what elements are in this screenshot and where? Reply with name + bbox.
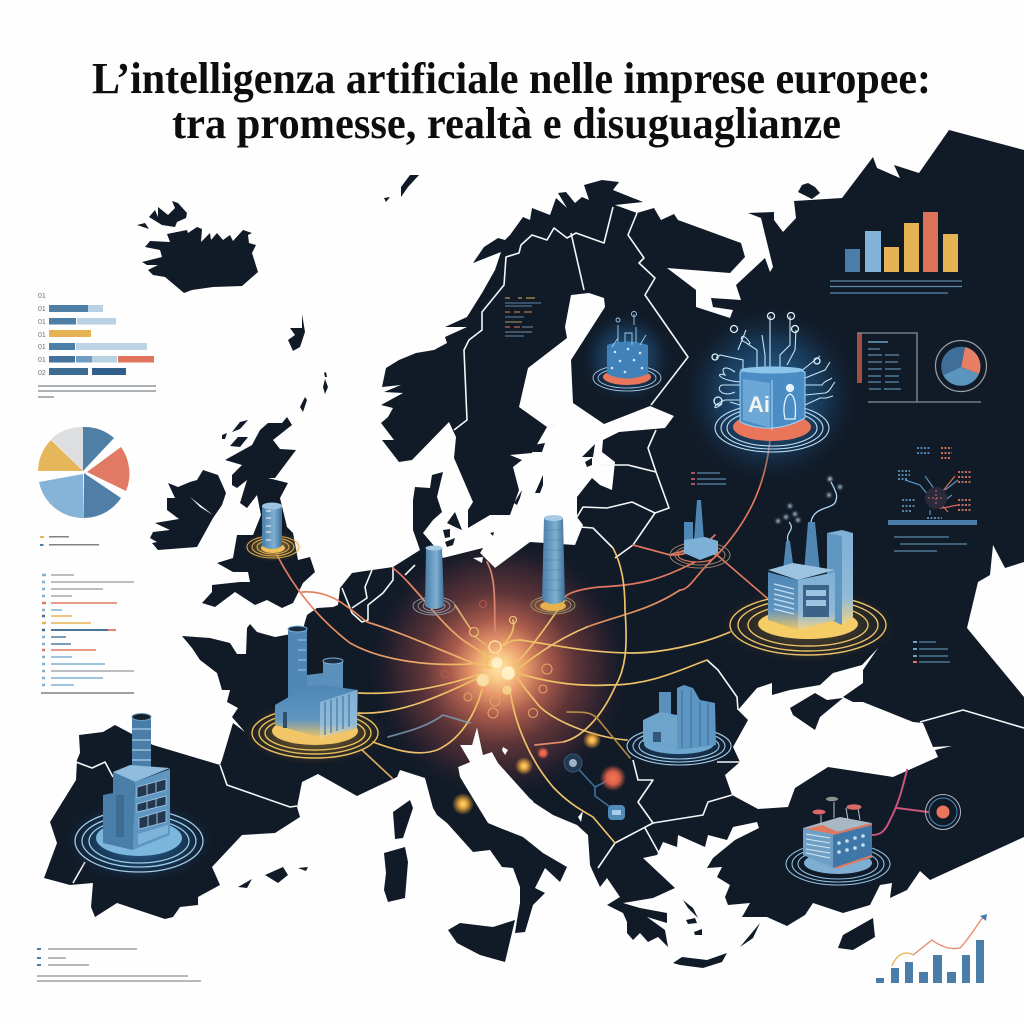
title: L’intelligenza artificiale nelle imprese europee: [92,54,931,103]
left chart: stacked bars: 01 [38,293,46,300]
country borders [73,207,1024,883]
left chart: pie [38,427,129,518]
node graph [564,754,626,820]
central glow [380,542,619,795]
left chart: stacked bars: 02 [38,370,46,377]
building: eastern factory [718,477,898,663]
iceland [137,201,258,293]
building: France [243,626,387,765]
tower: UK [243,502,303,562]
smoke [787,482,837,541]
building: Spain [61,714,217,885]
building: Turkey [786,797,890,885]
map of Europe [44,130,1024,968]
chart: bottom right bars and trend [876,914,987,983]
caption: eastern legend [913,642,950,662]
chart: top right bars [830,212,962,293]
left chart: stacked bars: 01 [38,319,46,326]
left chart: stacked bars [38,293,156,397]
bottom-left legend [37,949,201,981]
crimea [790,693,843,730]
AI cube [678,303,862,487]
title [92,54,931,148]
title: tra promesse, realtà e disuguaglianze [172,99,841,148]
great britain [202,417,315,608]
pie legend [40,536,99,546]
tower: Germany [413,546,455,615]
circuit traces [715,316,835,408]
hub nodes and rings [442,600,552,718]
AI cube: Ai [748,392,770,417]
figure [784,384,795,419]
tower: Poland [527,515,579,617]
building: Ukraine [621,685,737,770]
left chart: stacked bars: 01 [38,344,46,351]
mediterranean islands [238,800,875,968]
caption: Sweden legend [505,298,541,336]
ireland [150,470,226,550]
Finland AI module [579,310,675,406]
panel: text box and pie [857,333,986,402]
white inlets [190,497,583,822]
left chart: stacked bars: 01 [38,332,46,339]
left chart: stacked bars: 01 [38,306,46,313]
black sea [725,648,952,809]
left chart: stacked bars: 01 [38,357,46,364]
network caption [888,520,977,551]
left list with coloured rules [41,575,134,693]
building: small factory [670,500,730,568]
target icon [926,794,960,830]
small islands [222,175,820,547]
network diagram [898,448,972,518]
caption: small factory legend [691,473,726,484]
glowing dots [452,731,601,815]
connection lines [277,440,928,843]
